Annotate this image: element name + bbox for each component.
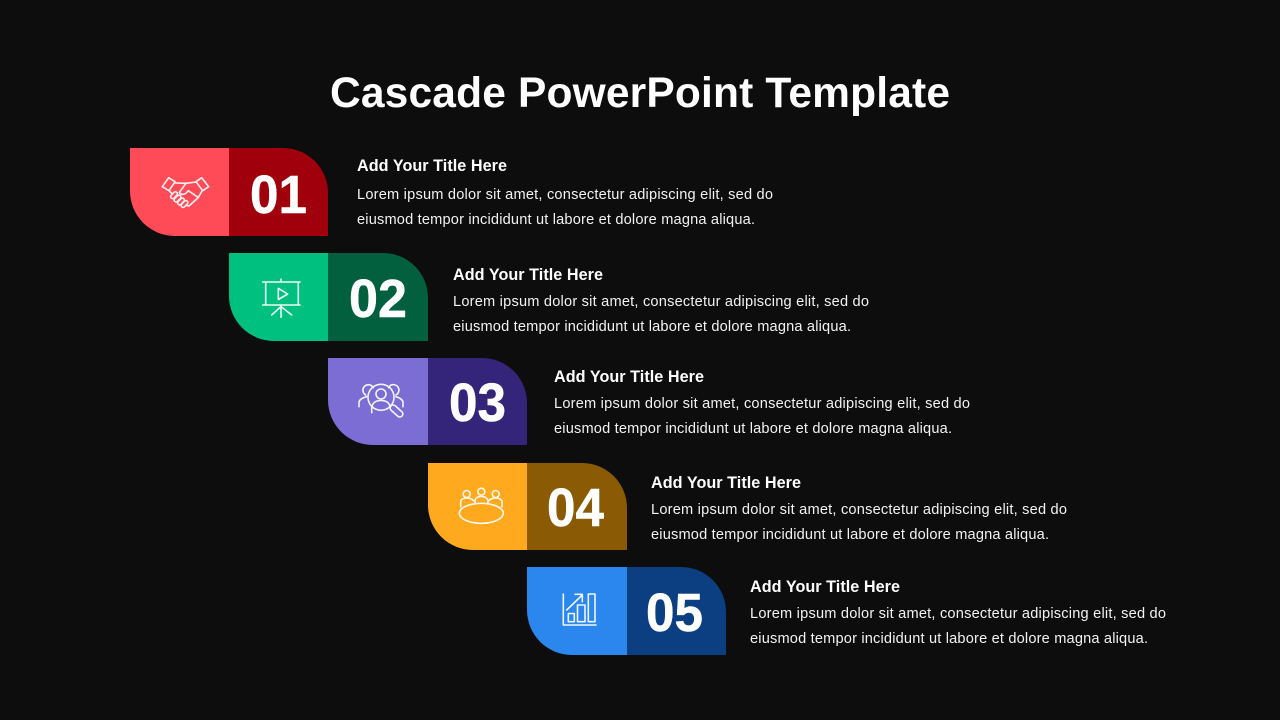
- text block 04: Add Your Title Here: [651, 474, 801, 492]
- step 04: [428, 463, 627, 550]
- icon: handshake: [162, 178, 209, 208]
- text block 03: Lorem ipsum dolor sit amet, consectetur adipiscing elit, sed do: [554, 396, 970, 412]
- number 03: 03: [449, 373, 506, 433]
- step 02 light tab: [229, 253, 328, 341]
- step 02: [229, 253, 428, 341]
- icon: people search: [359, 384, 404, 418]
- step 03: [328, 358, 527, 445]
- text block 03: Add Your Title Here: [554, 368, 704, 386]
- text block 01: eiusmod tempor incididunt ut labore et dolore magna aliqua.: [357, 212, 755, 228]
- step 05 dark tab: [627, 567, 726, 655]
- step 04 light tab: [428, 463, 527, 550]
- text block 02: [453, 266, 869, 335]
- text block 05: Lorem ipsum dolor sit amet, consectetur adipiscing elit, sed do: [750, 606, 1166, 622]
- number 05: 05: [646, 583, 703, 643]
- step 05 light tab: [527, 567, 627, 655]
- title: Cascade PowerPoint Template: [330, 70, 950, 117]
- text block 05: eiusmod tempor incididunt ut labore et dolore magna aliqua.: [750, 631, 1148, 647]
- text block 01: Add Your Title Here: [357, 157, 507, 175]
- number 02: 02: [349, 269, 407, 329]
- number 04: 04: [547, 478, 604, 538]
- text block 04: eiusmod tempor incididunt ut labore et dolore magna aliqua.: [651, 527, 1049, 543]
- text block 02: eiusmod tempor incididunt ut labore et dolore magna aliqua.: [453, 319, 851, 335]
- text block 04: [651, 474, 1067, 543]
- step 01 dark tab: [229, 148, 328, 236]
- step 02 dark tab: [328, 253, 428, 341]
- text block 03: [554, 368, 970, 437]
- icon: meeting table: [459, 488, 503, 523]
- text block 03: eiusmod tempor incididunt ut labore et dolore magna aliqua.: [554, 421, 952, 437]
- step 01: [130, 148, 328, 236]
- step 05: [527, 567, 726, 655]
- text block 01: [357, 157, 773, 228]
- step 04 dark tab: [527, 463, 627, 550]
- step 03 light tab: [328, 358, 428, 445]
- step 03 dark tab: [428, 358, 527, 445]
- text block 05: [750, 578, 1166, 647]
- icon: presentation board: [263, 279, 300, 317]
- number 01: 01: [250, 165, 307, 225]
- text block 02: Add Your Title Here: [453, 266, 603, 284]
- text block 04: Lorem ipsum dolor sit amet, consectetur adipiscing elit, sed do: [651, 502, 1067, 518]
- text block 05: Add Your Title Here: [750, 578, 900, 596]
- icon: growth chart: [563, 594, 596, 625]
- text block 01: Lorem ipsum dolor sit amet, consectetur adipiscing elit, sed do: [357, 187, 773, 203]
- step 01 light tab: [130, 148, 229, 236]
- text block 02: Lorem ipsum dolor sit amet, consectetur adipiscing elit, sed do: [453, 294, 869, 310]
